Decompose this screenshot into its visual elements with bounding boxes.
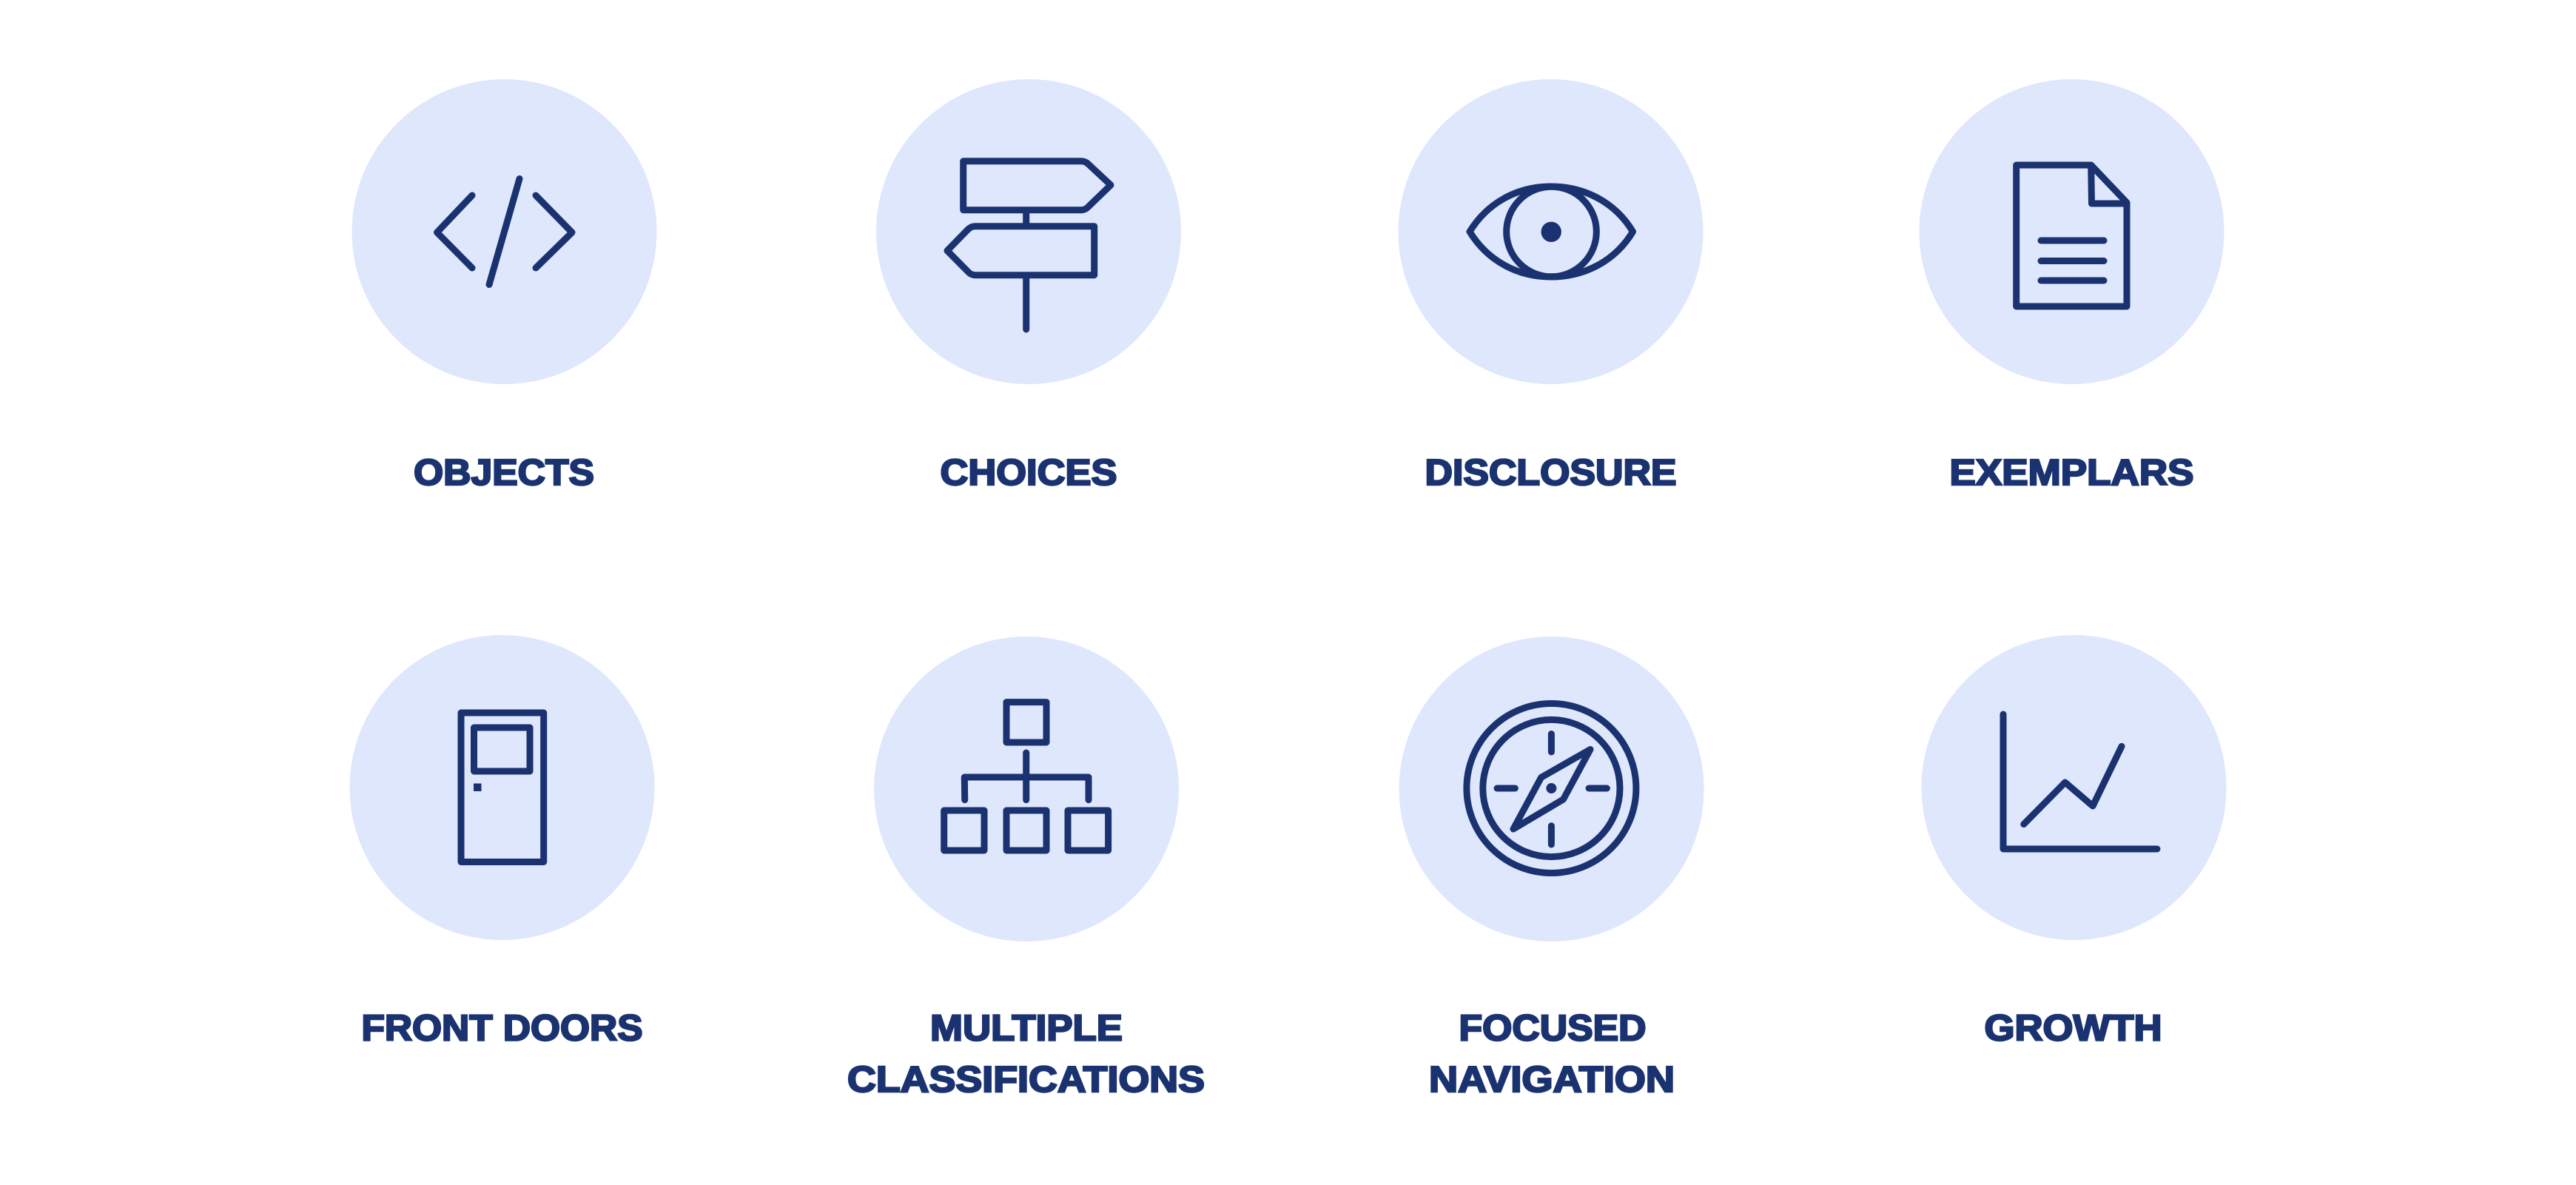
panel: growth [1921, 635, 2226, 1048]
icon circle: front doors [349, 635, 654, 940]
icon: door [461, 713, 544, 862]
panel: focused navigation [1399, 637, 1704, 1100]
label: multiple classifications: CLASSIFICATIONS [847, 1060, 1205, 1100]
panel: front doors [349, 635, 654, 1048]
icon: hierarchy [944, 702, 1109, 850]
icon circle: objects [352, 79, 657, 384]
panel: objects [352, 79, 657, 493]
label: multiple classifications [847, 1008, 1205, 1100]
panel: multiple classifications [847, 637, 1205, 1100]
icon circle: choices [876, 79, 1181, 384]
label: exemplars: EXEMPLARS [1949, 453, 2193, 493]
label: choices: CHOICES [940, 453, 1117, 493]
panel: choices [876, 79, 1181, 493]
icon circle: exemplars [1920, 79, 2224, 384]
label: focused navigation: NAVIGATION [1429, 1060, 1675, 1100]
icon: compass [1467, 703, 1636, 873]
icon circle: disclosure [1399, 79, 1704, 384]
label: objects: OBJECTS [414, 453, 594, 493]
panel: exemplars [1920, 79, 2224, 493]
label: focused navigation [1429, 1008, 1675, 1100]
icon: document [2017, 165, 2127, 306]
icon: line chart [2003, 714, 2157, 849]
label: growth: GROWTH [1985, 1008, 2162, 1048]
label: focused navigation: FOCUSED [1459, 1008, 1646, 1048]
label: disclosure: DISCLOSURE [1425, 453, 1677, 493]
icon: eye [1470, 187, 1632, 277]
icon: signpost [947, 161, 1111, 329]
icon circle: multiple classifications [874, 637, 1179, 941]
panel: disclosure [1399, 79, 1704, 493]
icon circle: focused navigation [1399, 637, 1704, 941]
label: front doors: FRONT DOORS [361, 1008, 642, 1048]
icon: code brackets [437, 179, 572, 284]
icon circle: growth [1921, 635, 2226, 940]
label: multiple classifications: MULTIPLE [930, 1008, 1123, 1048]
